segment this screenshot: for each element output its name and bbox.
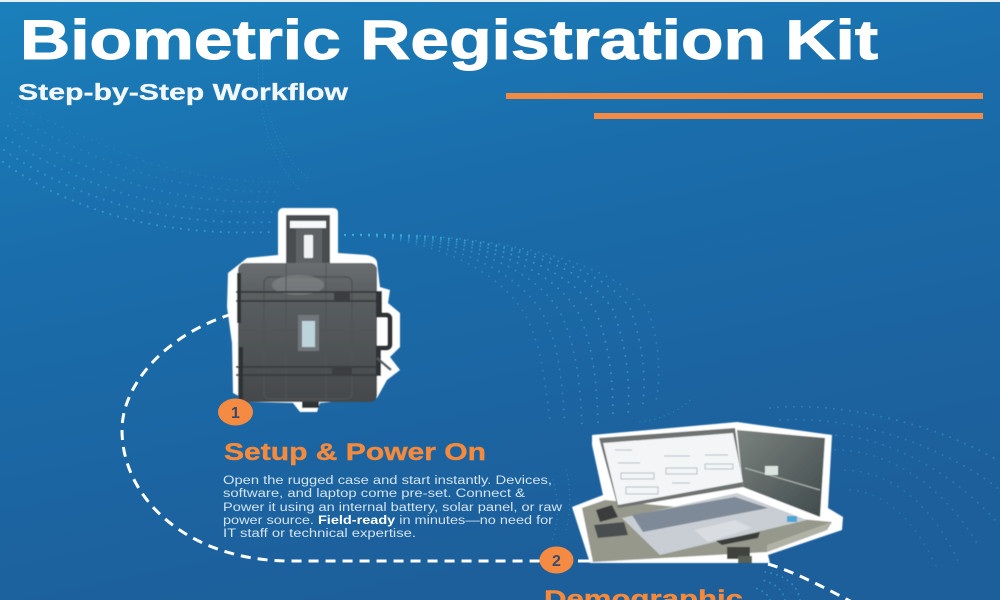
dashed workflow path bbox=[122, 314, 852, 600]
step 1 description: power source. Field-ready in minutes—no need for bbox=[223, 515, 553, 527]
title: Biometric Registration Kit bbox=[20, 8, 878, 71]
step 1 description: Power it using an internal battery, solar panel, or raw bbox=[223, 502, 563, 514]
step 1 description: Open the rugged case and start instantly. Devices, bbox=[223, 475, 552, 487]
subtitle: Step-by-Step Workflow bbox=[18, 79, 348, 105]
step 1 description: software, and laptop come pre-set. Connect & bbox=[223, 488, 525, 500]
badge: step 2 bbox=[540, 546, 574, 574]
decorative orange header lines bbox=[506, 93, 983, 119]
icon: rugged case photo bbox=[227, 208, 400, 412]
dashed path segment beside laptop bbox=[578, 560, 590, 562]
badge: step 2: 2 bbox=[552, 553, 561, 570]
step 1 description bbox=[223, 475, 563, 540]
step 1 description: IT staff or technical expertise. bbox=[223, 528, 416, 540]
icon: laptop in open case photo bbox=[572, 422, 843, 563]
badge: step 1 bbox=[218, 398, 253, 426]
badge: step 1: 1 bbox=[231, 405, 240, 422]
step 1 heading: Setup & Power On bbox=[224, 439, 486, 466]
